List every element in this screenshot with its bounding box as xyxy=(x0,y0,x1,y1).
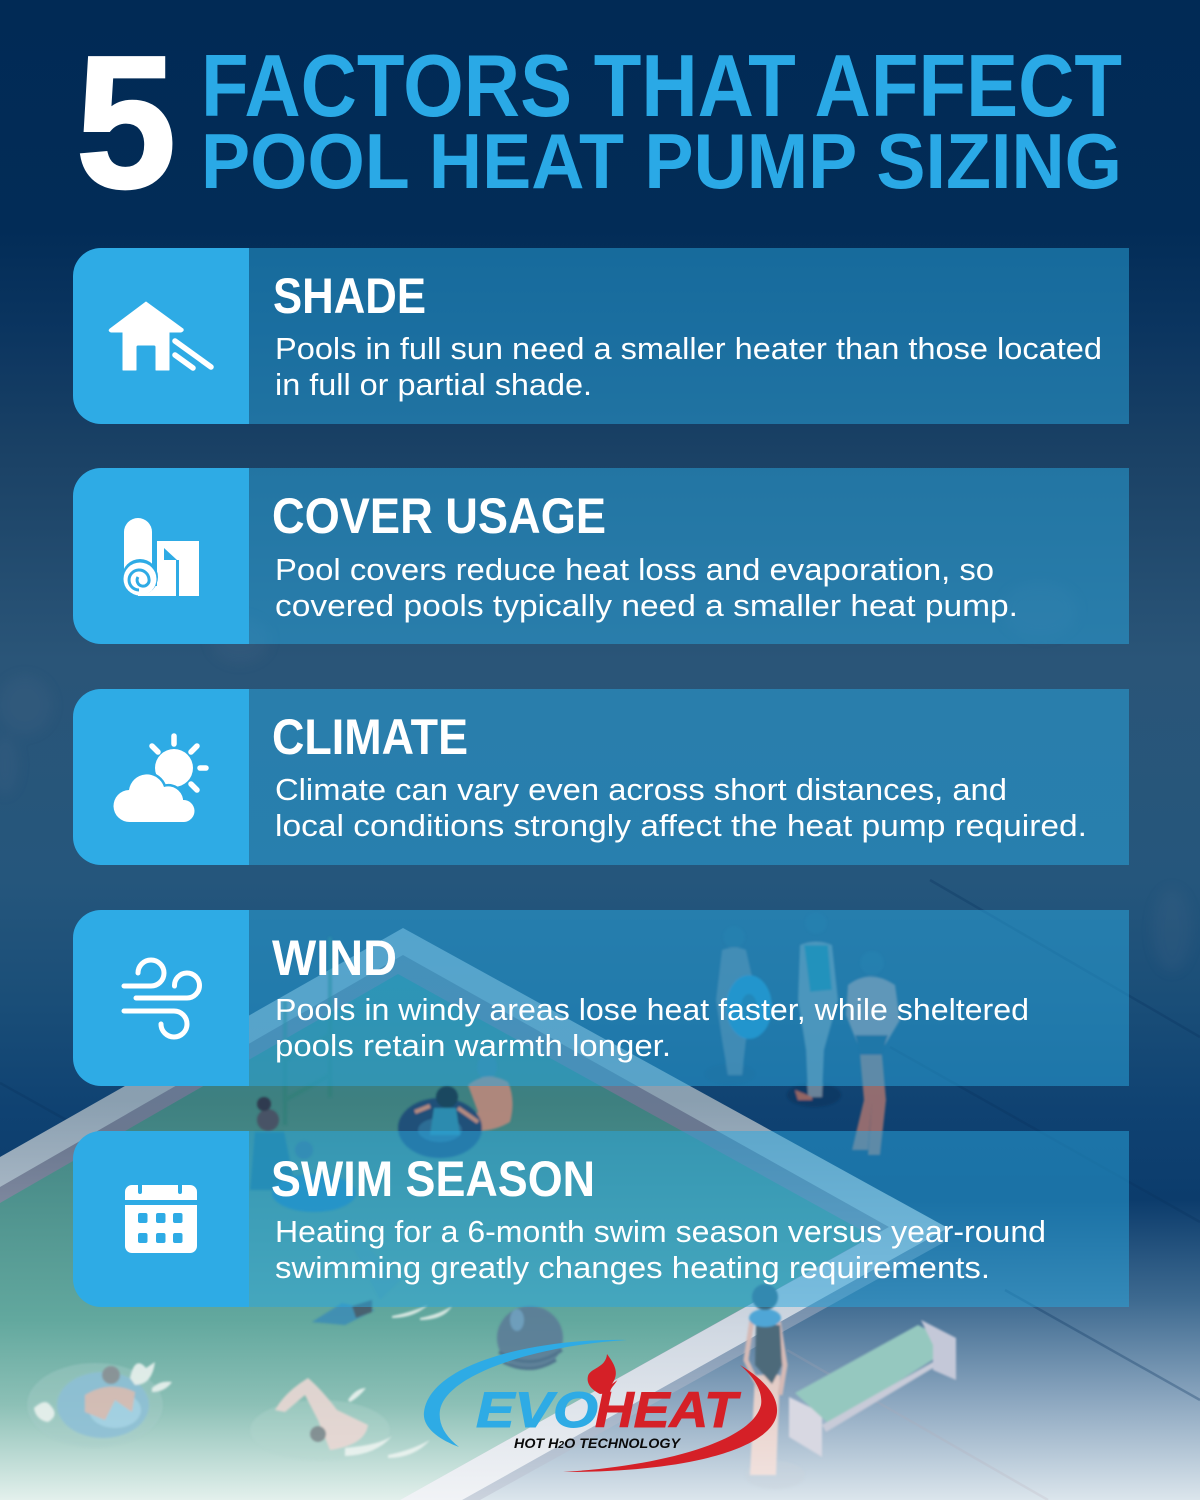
heading: swim season: SWIM SEASON xyxy=(271,1151,595,1207)
title xyxy=(76,17,1122,227)
logo wordmark: HEAT xyxy=(595,1382,742,1438)
description: swim season: swimming greatly changes heating requirements. xyxy=(275,1250,990,1285)
icon: rolled pool cover xyxy=(122,518,199,596)
description: wind: Pools in windy areas lose heat faster, while sheltered xyxy=(275,992,1029,1027)
panel: cover usage xyxy=(73,468,1129,644)
heading: wind: WIND xyxy=(272,930,397,986)
description: wind: pools retain warmth longer. xyxy=(275,1028,671,1063)
heading: cover usage: COVER USAGE xyxy=(272,488,606,544)
icon: calendar xyxy=(125,1185,197,1253)
title numeral 5: 5 xyxy=(76,17,176,227)
description: climate xyxy=(275,772,1087,843)
description: climate: Climate can vary even across short distances, and xyxy=(275,772,1007,807)
description: swim season xyxy=(275,1214,1046,1285)
icon: house with shade lines xyxy=(109,302,211,370)
description: cover usage: covered pools typically need a smaller heat pump. xyxy=(275,588,1018,623)
heading: shade: SHADE xyxy=(273,268,426,324)
description: climate: local conditions strongly affect the heat pump required. xyxy=(275,808,1087,843)
icon: sun behind cloud xyxy=(114,736,206,822)
description: cover usage xyxy=(275,552,1018,623)
panel: swim season xyxy=(73,1131,1129,1307)
description: shade: Pools in full sun need a smaller heater than those located xyxy=(275,331,1102,366)
description: cover usage: Pool covers reduce heat loss and evaporation, so xyxy=(275,552,994,587)
panel: wind xyxy=(73,910,1129,1086)
panel: shade xyxy=(73,248,1129,424)
icon: wind xyxy=(124,960,199,1037)
logo blue swoosh xyxy=(424,1340,627,1447)
description: wind xyxy=(275,992,1029,1063)
description: shade: in full or partial shade. xyxy=(275,367,592,402)
title line 2: POOL HEAT PUMP SIZING xyxy=(201,117,1122,205)
logo tagline: HOT H2O TECHNOLOGY xyxy=(514,1435,682,1451)
logo: EvoHeat xyxy=(424,1340,777,1472)
logo wordmark: EVO xyxy=(476,1382,598,1438)
logo wordmark xyxy=(476,1382,742,1438)
description: shade xyxy=(275,331,1102,402)
panel: climate xyxy=(73,689,1129,865)
logo red swoosh xyxy=(563,1365,777,1472)
heading: climate: CLIMATE xyxy=(272,709,468,765)
description: swim season: Heating for a 6-month swim season versus year-round xyxy=(275,1214,1046,1249)
logo flame xyxy=(588,1354,618,1394)
